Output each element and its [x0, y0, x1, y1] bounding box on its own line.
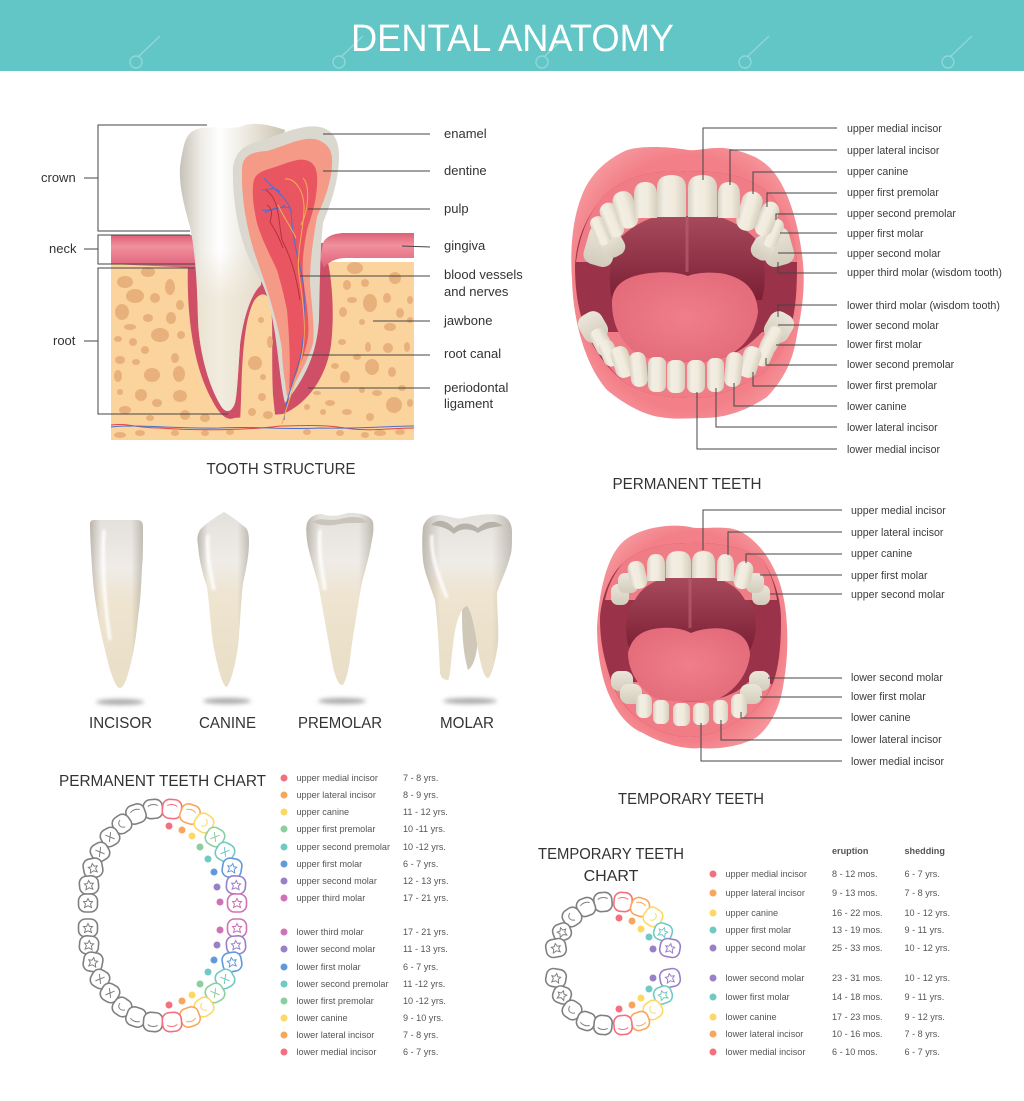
- legend: permanent teeth chart: 17 - 21 yrs.: [403, 927, 448, 937]
- legend: permanent teeth chart: 17 - 21 yrs.: [403, 893, 448, 903]
- heading: temporary teeth chart: CHART: [584, 868, 639, 885]
- position dots: [616, 914, 656, 1012]
- heading: temporary teeth chart: [538, 846, 684, 885]
- canine: [197, 512, 256, 732]
- upper molars: [581, 223, 797, 269]
- lower teeth: [587, 323, 786, 393]
- leader lines: temporary teeth: [701, 510, 842, 761]
- labels: permanent teeth: [847, 123, 1002, 456]
- labels: permanent teeth: lower lateral incisor: [847, 422, 938, 434]
- tongue: [628, 628, 750, 702]
- labels: temporary teeth: upper medial incisor: [851, 505, 946, 517]
- labels: temporary teeth: lower second molar: [851, 672, 943, 684]
- heading: permanent teeth chart: PERMANENT TEETH CHART: [59, 773, 266, 790]
- root label: [53, 268, 228, 414]
- legend: permanent teeth chart: 6 - 7 yrs.: [403, 859, 438, 869]
- blood vessels and nerves label: [300, 267, 523, 299]
- legend: temporary teeth chart: 14 - 18 mos.: [832, 992, 883, 1002]
- lower temporary molars: [611, 671, 770, 704]
- gingiva: [111, 233, 414, 268]
- lips: [597, 526, 787, 748]
- legend: temporary teeth chart: lower second molar: [726, 973, 804, 983]
- legend: temporary teeth chart: upper first molar: [726, 925, 791, 935]
- labels: permanent teeth: upper second premolar: [847, 208, 956, 220]
- incisor: [89, 520, 152, 732]
- labels: temporary teeth: lower canine: [851, 712, 911, 724]
- legend: permanent teeth chart: upper first premolar: [296, 824, 375, 834]
- bottom blood vessels: [111, 425, 414, 430]
- labels: permanent teeth: lower first molar: [847, 339, 922, 351]
- gingiva label: gingiva: [444, 238, 486, 253]
- palate midline: [688, 579, 692, 628]
- labels: temporary teeth: upper lateral incisor: [851, 527, 944, 539]
- upper temporary molars: [611, 573, 770, 605]
- legend: temporary teeth chart: 9 - 12 yrs.: [904, 1012, 945, 1022]
- legend: temporary teeth chart: 17 - 23 mos.: [832, 1012, 883, 1022]
- title: DENTAL ANATOMY: [351, 18, 674, 60]
- legend: temporary teeth chart: [710, 846, 950, 1057]
- blood vessels and nerves label: and nerves: [444, 284, 509, 299]
- heading: permanent teeth: PERMANENT TEETH: [612, 476, 762, 493]
- colored right teeth: [162, 799, 246, 1032]
- labels: temporary teeth: upper first molar: [851, 570, 928, 582]
- panel: four tooth types: [89, 512, 512, 732]
- legend: permanent teeth chart: lower first molar: [296, 962, 361, 972]
- tooth exterior: [180, 124, 285, 411]
- legend: permanent teeth chart: 6 - 7 yrs.: [403, 1047, 438, 1057]
- legend: permanent teeth chart: 11 - 12 yrs.: [403, 807, 448, 817]
- legend: permanent teeth chart: upper second premolar: [296, 842, 390, 852]
- legend: permanent teeth chart: lower third molar: [296, 927, 364, 937]
- molar: [422, 514, 512, 732]
- premolar: [298, 513, 382, 732]
- column headers: eruption: [832, 846, 868, 856]
- legend: temporary teeth chart: 7 - 8 yrs.: [904, 888, 940, 898]
- labels: temporary teeth: [851, 505, 946, 768]
- enamel cross section: [233, 126, 339, 403]
- crown label: [41, 125, 207, 231]
- header banner: [0, 0, 1024, 71]
- gray left teeth: [78, 799, 163, 1032]
- labels: temporary teeth: upper second molar: [851, 589, 945, 601]
- legend: temporary teeth chart: 10 - 12 yrs.: [904, 973, 950, 983]
- legend: permanent teeth chart: 7 - 8 yrs.: [403, 773, 438, 783]
- periodontal ligament: [188, 240, 333, 419]
- periodontal ligament label: ligament: [444, 396, 494, 411]
- legend: temporary teeth chart: 25 - 33 mos.: [832, 943, 883, 953]
- jawbone label: [373, 313, 492, 328]
- legend: permanent teeth chart: 10 -12 yrs.: [403, 996, 446, 1006]
- legend: permanent teeth chart: 10 -11 yrs.: [403, 824, 445, 834]
- panel: permanent teeth arch diagram: [78, 799, 246, 1032]
- lower gum: [588, 332, 790, 398]
- palate: [626, 578, 756, 650]
- labels: permanent teeth: upper first premolar: [847, 187, 939, 199]
- neck label: [49, 235, 195, 264]
- labels: permanent teeth: upper first molar: [847, 228, 924, 240]
- labels: temporary teeth: lower first molar: [851, 691, 926, 703]
- palate: [610, 216, 765, 300]
- upper teeth: [626, 551, 755, 591]
- legend: temporary teeth chart: lower lateral incisor: [726, 1029, 803, 1039]
- legend: temporary teeth chart: upper lateral incisor: [726, 888, 805, 898]
- root label: root: [53, 333, 76, 348]
- panel: permanent teeth mouth: [571, 123, 1002, 456]
- legend: permanent teeth chart: upper third molar: [296, 893, 365, 903]
- root shade: [196, 250, 261, 411]
- labels: permanent teeth: lower canine: [847, 401, 907, 413]
- legend: temporary teeth chart: upper canine: [726, 908, 778, 918]
- legend: permanent teeth chart: upper second molar: [296, 876, 377, 886]
- crown label: crown: [41, 170, 76, 185]
- legend: temporary teeth chart: 6 - 7 yrs.: [904, 1047, 940, 1057]
- legend: temporary teeth chart: 8 - 12 mos.: [832, 869, 878, 879]
- molar: MOLAR: [440, 715, 494, 732]
- legend: permanent teeth chart: 9 - 10 yrs.: [403, 1013, 443, 1023]
- heading: temporary teeth chart: TEMPORARY TEETH: [538, 846, 684, 863]
- column headers: shedding: [904, 846, 945, 856]
- gray left teeth: [545, 892, 613, 1035]
- labels: permanent teeth: upper medial incisor: [847, 123, 942, 135]
- lower molars: [574, 308, 798, 346]
- panel: temporary teeth mouth: [597, 505, 946, 768]
- legend: temporary teeth chart: 16 - 22 mos.: [832, 908, 883, 918]
- upper teeth: [588, 175, 786, 250]
- legend: temporary teeth chart: 9 - 13 mos.: [832, 888, 878, 898]
- palate midline: [686, 217, 688, 272]
- labels: permanent teeth: upper lateral incisor: [847, 145, 940, 157]
- legend: permanent teeth chart: 12 - 13 yrs.: [403, 876, 448, 886]
- position dots: [166, 822, 224, 1008]
- legend: temporary teeth chart: 10 - 16 mos.: [832, 1029, 883, 1039]
- upper gum: [576, 171, 797, 262]
- labels: temporary teeth: upper canine: [851, 548, 912, 560]
- labels: temporary teeth: lower lateral incisor: [851, 734, 942, 746]
- labels: permanent teeth: lower medial incisor: [847, 444, 940, 456]
- heading: temporary teeth: TEMPORARY TEETH: [618, 791, 764, 808]
- legend: temporary teeth chart: upper medial incisor: [726, 869, 807, 879]
- labels: permanent teeth: lower first premolar: [847, 380, 938, 392]
- legend: temporary teeth chart: 10 - 12 yrs.: [904, 943, 950, 953]
- premolar: PREMOLAR: [298, 715, 382, 732]
- column headers: [832, 846, 945, 856]
- leader lines: permanent teeth: [697, 128, 837, 449]
- labels: permanent teeth: lower second molar: [847, 320, 939, 332]
- root canal label: root canal: [444, 346, 501, 361]
- enamel label: enamel: [444, 126, 487, 141]
- neck label: neck: [49, 241, 77, 256]
- legend: temporary teeth chart: 7 - 8 yrs.: [904, 1029, 940, 1039]
- lips: [571, 147, 804, 419]
- panel: tooth structure illustration: [41, 124, 523, 440]
- panel: temporary teeth arch diagram: [545, 892, 681, 1035]
- legend: permanent teeth chart: lower canine: [296, 1013, 348, 1023]
- legend: permanent teeth chart: 7 - 8 yrs.: [403, 1030, 438, 1040]
- legend: temporary teeth chart: 9 - 11 yrs.: [904, 925, 944, 935]
- legend: permanent teeth chart: lower first premolar: [296, 996, 374, 1006]
- legend: permanent teeth chart: 6 - 7 yrs.: [403, 962, 438, 972]
- mouth cavity: [575, 171, 797, 398]
- colored right teeth: [613, 892, 681, 1035]
- legend: temporary teeth chart: lower canine: [726, 1012, 777, 1022]
- incisor: INCISOR: [89, 715, 152, 732]
- legend: temporary teeth chart: lower first molar: [726, 992, 790, 1002]
- blood vessels and nerves label: blood vessels: [444, 267, 523, 282]
- canine: CANINE: [199, 715, 256, 732]
- mouth cavity: [600, 543, 781, 737]
- legend: permanent teeth chart: 11 -12 yrs.: [403, 979, 445, 989]
- nerves and blood vessels: [262, 178, 308, 424]
- upper gum: [605, 543, 777, 600]
- lower teeth: [636, 694, 747, 726]
- legend: permanent teeth chart: upper first molar: [296, 859, 362, 869]
- legend: temporary teeth chart: lower medial incisor: [726, 1047, 805, 1057]
- heading: tooth structure: TOOTH STRUCTURE: [206, 461, 356, 478]
- dentine label: dentine: [444, 163, 487, 178]
- interdental bone: [240, 294, 276, 424]
- labels: permanent teeth: lower second premolar: [847, 359, 955, 371]
- legend: temporary teeth chart: 13 - 19 mos.: [832, 925, 883, 935]
- legend: temporary teeth chart: 6 - 10 mos.: [832, 1047, 878, 1057]
- legend: permanent teeth chart: upper lateral incisor: [296, 790, 376, 800]
- labels: temporary teeth: lower medial incisor: [851, 756, 944, 768]
- pulp label: pulp: [444, 201, 469, 216]
- legend: temporary teeth chart: 10 - 12 yrs.: [904, 908, 950, 918]
- labels: permanent teeth: upper canine: [847, 166, 908, 178]
- legend: permanent teeth chart: [280, 773, 448, 1057]
- labels: permanent teeth: lower third molar (wisdom tooth): [847, 300, 1000, 312]
- legend: permanent teeth chart: lower medial incisor: [296, 1047, 376, 1057]
- tongue: [612, 272, 758, 362]
- labels: permanent teeth: upper second molar: [847, 248, 941, 260]
- dentine: [242, 139, 332, 397]
- legend: temporary teeth chart: upper second molar: [726, 943, 806, 953]
- legend: permanent teeth chart: lower second molar: [296, 944, 375, 954]
- legend: permanent teeth chart: upper canine: [296, 807, 349, 817]
- periodontal ligament label: [308, 380, 508, 411]
- legend: permanent teeth chart: 11 - 13 yrs.: [403, 944, 448, 954]
- legend: permanent teeth chart: 10 -12 yrs.: [403, 842, 446, 852]
- labels: permanent teeth: upper third molar (wisdom tooth): [847, 267, 1002, 279]
- legend: permanent teeth chart: lower lateral incisor: [296, 1030, 374, 1040]
- legend: temporary teeth chart: 9 - 11 yrs.: [904, 992, 944, 1002]
- jawbone label: jawbone: [443, 313, 492, 328]
- legend: temporary teeth chart: 23 - 31 mos.: [832, 973, 883, 983]
- pulp: [253, 160, 317, 390]
- legend: permanent teeth chart: lower second premolar: [296, 979, 388, 989]
- jawbone: [111, 262, 414, 440]
- legend: permanent teeth chart: upper medial incisor: [296, 773, 378, 783]
- legend: temporary teeth chart: 6 - 7 yrs.: [904, 869, 940, 879]
- periodontal ligament label: periodontal: [444, 380, 508, 395]
- gingiva label: [402, 238, 486, 253]
- lower gum: [612, 682, 772, 737]
- legend: permanent teeth chart: 8 - 9 yrs.: [403, 790, 438, 800]
